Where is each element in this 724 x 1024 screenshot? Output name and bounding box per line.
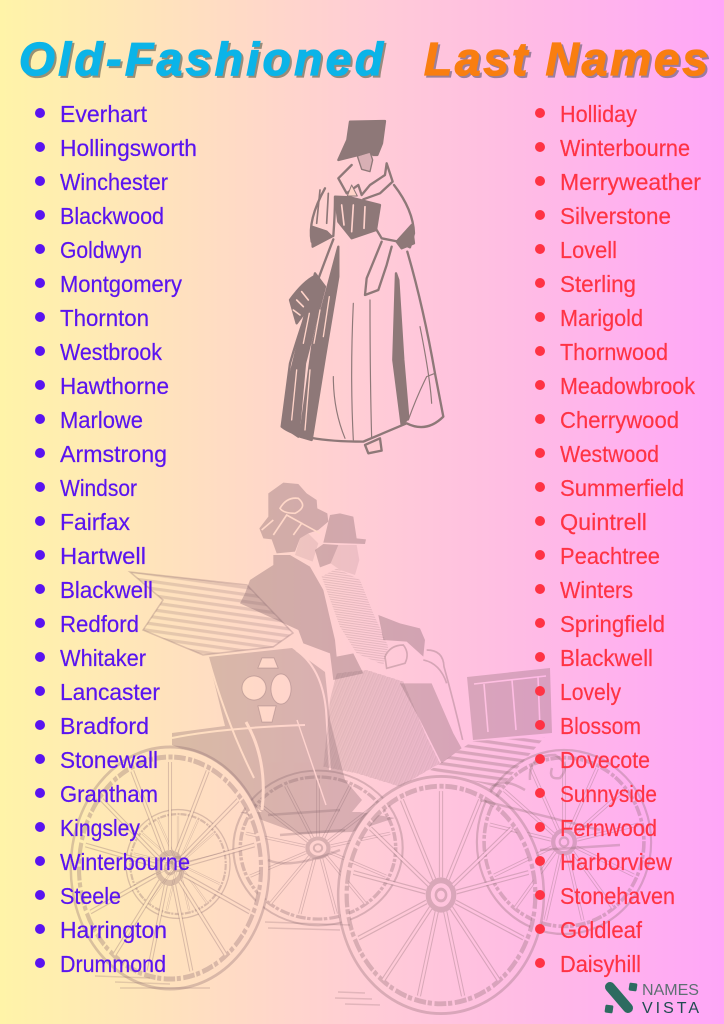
list: left column of names: Goldwyn	[60, 237, 142, 263]
list: right column of names: Marigold	[560, 305, 643, 331]
list: right column of names: Blossom	[560, 713, 641, 739]
list: right column of names: Sunnyside	[560, 781, 657, 807]
title: Old-Fashioned: Old-Fashioned	[21, 35, 386, 87]
list: left column of names: Montgomery	[60, 271, 182, 297]
list: right column of names: Summerfield	[560, 475, 684, 501]
list: left column of names: Hartwell	[60, 543, 146, 569]
list: right column of names: Quintrell	[560, 509, 647, 535]
logo icon	[604, 982, 638, 1014]
list: left column of names: Blackwell	[60, 577, 153, 603]
list: left column of names: Bradford	[60, 713, 149, 739]
face	[357, 152, 373, 172]
list: right column of names: Springfield	[560, 611, 665, 637]
list: right column of names: Thornwood	[560, 339, 668, 365]
logo: Names Vista	[604, 982, 699, 1017]
skirt outline	[282, 239, 443, 442]
logo: Names Vista: VISTA	[642, 1000, 699, 1017]
list: left column of names: Harrington	[60, 917, 167, 943]
list: left column of names: Westbrook	[60, 339, 162, 365]
hat bow	[262, 498, 320, 535]
list: right column of names: Cherrywood	[560, 407, 679, 433]
carriage rear wheels	[126, 750, 651, 934]
face tint	[295, 533, 359, 575]
list: left column of names	[35, 101, 197, 977]
list: left column of names: Thornton	[60, 305, 149, 331]
list: right column of names: Peachtree	[560, 543, 660, 569]
woman coat and hat	[240, 483, 425, 680]
list: left column of names: Lancaster	[60, 679, 160, 705]
list: right column of names: Silverstone	[560, 203, 671, 229]
list: left column of names: Steele	[60, 883, 121, 909]
list: right column of names: Sterling	[560, 271, 636, 297]
left sleeve	[311, 188, 335, 242]
title: Last Names: Last Names	[424, 33, 708, 85]
list: left column of names: Marlowe	[60, 407, 143, 433]
illustration: horse-drawn carriage with couple	[71, 483, 651, 1014]
arm and hand	[365, 242, 392, 295]
list: left column of names: Hawthorne	[60, 373, 169, 399]
muff	[290, 276, 315, 323]
logo text: NAMES	[642, 982, 699, 999]
list: right column of names: Goldleaf	[560, 917, 643, 943]
list: left column of names: Redford	[60, 611, 139, 637]
list: left column of names: Everhart	[60, 101, 148, 127]
list: right column of names: Harborview	[560, 849, 672, 875]
man's coat	[322, 568, 388, 665]
right sleeve	[377, 185, 414, 247]
list: right column of names: Winters	[560, 577, 633, 603]
title	[19, 33, 710, 87]
list: left column of names: Winterbourne	[60, 849, 190, 875]
dark skirt folds	[300, 247, 338, 440]
list: right column of names: Westwood	[560, 441, 659, 467]
list: right column of names	[535, 101, 701, 977]
couple seated	[240, 483, 463, 787]
hat	[338, 121, 385, 160]
list: left column of names: Armstrong	[60, 441, 167, 467]
lamp	[242, 658, 291, 722]
long skirt	[323, 670, 462, 787]
front wheels	[71, 747, 544, 1014]
list: left column of names: Whitaker	[60, 645, 146, 671]
illustration: woman in period dress	[282, 121, 443, 453]
ground shadows	[95, 922, 380, 1005]
list: right column of names: Daisyhill	[560, 951, 641, 977]
list: left column of names: Grantham	[60, 781, 158, 807]
list: right column of names: Blackwell	[560, 645, 653, 671]
list: right column of names: Fernwood	[560, 815, 657, 841]
list: left column of names: Stonewall	[60, 747, 158, 773]
list: right column of names: Holliday	[560, 101, 637, 127]
list: left column of names: Hollingsworth	[60, 135, 197, 161]
list: left column of names: Fairfax	[60, 509, 130, 535]
bodice	[335, 197, 380, 238]
folded carriage hood	[130, 572, 293, 655]
list: left column of names: Blackwood	[60, 203, 164, 229]
list: left column of names: Windsor	[60, 475, 137, 501]
list: right column of names: Lovely	[560, 679, 621, 705]
list: right column of names: Lovell	[560, 237, 617, 263]
list: right column of names: Dovecote	[560, 747, 650, 773]
list: right column of names: Meadowbrook	[560, 373, 695, 399]
list: right column of names: Winterbourne	[560, 135, 690, 161]
carriage dark body	[172, 648, 552, 834]
carriage light trim	[172, 650, 546, 810]
list: left column of names: Drummond	[60, 951, 166, 977]
collar	[338, 163, 393, 199]
list: left column of names: Kingsley	[60, 815, 140, 841]
hand and rail	[385, 645, 463, 740]
shoe	[365, 438, 382, 453]
title: Old-Fashioned: Old-Fashioned	[19, 33, 384, 85]
list: right column of names: Merryweather	[560, 169, 701, 195]
undercarriage lines and scroll	[268, 755, 620, 863]
title: Last Names: Last Names	[426, 35, 710, 87]
list: right column of names: Stonehaven	[560, 883, 675, 909]
list: left column of names: Winchester	[60, 169, 168, 195]
